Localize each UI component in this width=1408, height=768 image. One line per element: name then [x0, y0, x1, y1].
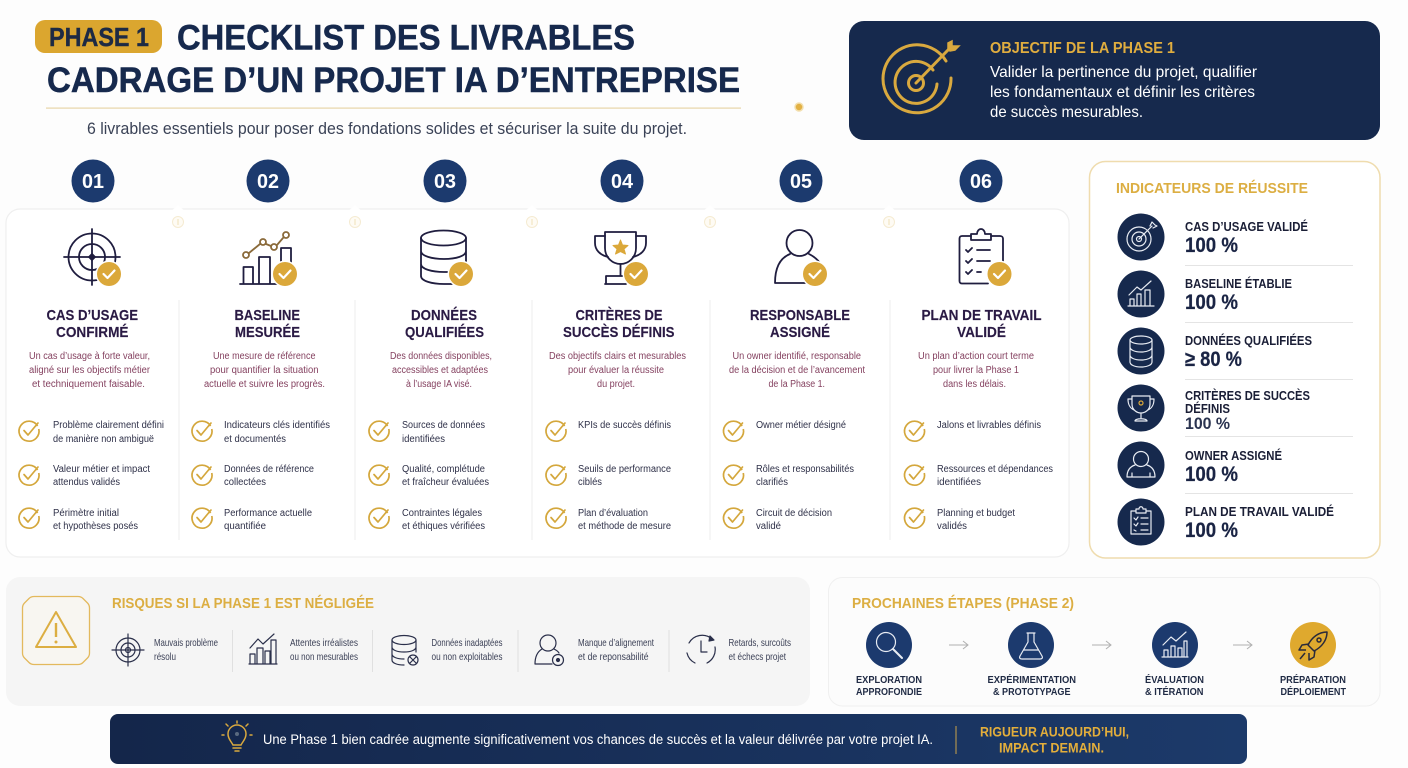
checklist: de manière non ambiguë — [53, 434, 154, 445]
risk: manque d'alignement: Manque d’alignement — [578, 637, 654, 649]
banner slogan: IMPACT DEMAIN. — [999, 740, 1104, 756]
heading: CAS D’USAGE — [46, 307, 138, 324]
checklist: identifiées — [937, 477, 981, 488]
icon: clipboard checklist — [960, 229, 1013, 288]
card 06: plan de travail validé — [905, 160, 1053, 532]
description: Des données disponibles, — [390, 351, 492, 362]
description — [204, 351, 325, 390]
description: pour quantifier la situation — [210, 365, 318, 376]
indicator: baseline établie — [1118, 270, 1292, 318]
heading — [405, 307, 484, 341]
description: de la Phase 1. — [768, 379, 825, 390]
checklist: Performance actuelle — [224, 508, 312, 519]
checklist: et éthiques vérifiées — [402, 521, 485, 532]
banner message: Une Phase 1 bien cadrée augmente significativement vos chances de succès et la valeur délivrée par votre projet IA. — [263, 732, 933, 747]
checklist: Rôles et responsabilités — [756, 464, 854, 475]
indicator: données qualifiées: ≥ 80 % — [1185, 348, 1242, 371]
risk: attentes irréalistes — [249, 634, 358, 664]
checklist: Contraintes légales — [402, 508, 482, 519]
indicator: données qualifiées — [1118, 328, 1312, 374]
description — [918, 351, 1034, 390]
next steps heading: PROCHAINES ÉTAPES (PHASE 2) — [852, 595, 1074, 612]
heading: MESURÉE — [235, 324, 300, 341]
card 01: cas d'usage confirmé — [19, 160, 164, 532]
number 05 — [780, 160, 822, 202]
description: du projet. — [597, 379, 635, 390]
step: exploration: EXPLORATION — [856, 674, 922, 686]
indicator: plan de travail validé: PLAN DE TRAVAIL VALIDÉ — [1185, 504, 1334, 519]
number 04 — [600, 160, 644, 202]
checklist: Circuit de décision — [756, 508, 832, 519]
checklist: et documentés — [224, 434, 286, 445]
panel: prochaines étapes (phase 2) — [828, 578, 1380, 706]
heading: ASSIGNÉ — [770, 324, 830, 341]
step: évaluation: & ITÉRATION — [1145, 685, 1204, 698]
indicator: critères de succès définis: 100 % — [1185, 414, 1230, 433]
heading — [46, 307, 138, 341]
checklist — [192, 420, 330, 532]
risk: attentes irréalistes: ou non mesurables — [290, 651, 358, 663]
indicator: critères de succès définis: DÉFINIS — [1185, 401, 1230, 416]
number 01: 01 — [82, 171, 104, 193]
icon: warning box — [22, 596, 90, 664]
description: à l’usage IA visé. — [406, 379, 472, 390]
icon: target — [64, 229, 122, 288]
panel: objectif de la phase 1 — [849, 21, 1380, 140]
checklist — [905, 420, 1053, 532]
objective text: Valider la pertinence du projet, qualifier — [990, 64, 1258, 81]
bottom banner — [110, 714, 1247, 764]
step: préparation déploiement — [1280, 622, 1347, 698]
checklist: attendus validés — [53, 477, 120, 488]
heading: RESPONSABLE — [750, 307, 850, 324]
panel: indicateurs de réussite — [1090, 162, 1380, 558]
indicator: critères de succès définis — [1118, 384, 1310, 433]
step: expérimentation: EXPÉRIMENTATION — [988, 673, 1076, 686]
icon: database — [421, 230, 474, 288]
icon: light bulb — [222, 721, 252, 751]
arrow — [1092, 641, 1111, 649]
description: et techniquement faisable. — [32, 379, 145, 390]
checklist: identifiées — [402, 434, 445, 445]
card 04: critères de succès définis — [546, 160, 686, 532]
indicator: plan de travail validé: 100 % — [1185, 519, 1238, 542]
objective text: de succès mesurables. — [990, 104, 1143, 121]
risk: retards — [687, 635, 791, 663]
description: de la décision et de l’avancement — [729, 365, 865, 376]
risk: mauvais problème: Mauvais problème — [154, 637, 218, 649]
checklist: validés — [937, 521, 967, 532]
description — [390, 351, 492, 390]
number 03 — [424, 160, 466, 202]
indicators heading: INDICATEURS DE RÉUSSITE — [1116, 180, 1308, 197]
indicator: baseline établie: 100 % — [1185, 291, 1238, 314]
number 02: 02 — [257, 171, 279, 193]
heading — [922, 307, 1042, 341]
indicator: critères de succès définis: CRITÈRES DE SUCCÈS — [1185, 388, 1310, 403]
decorative gold dot — [795, 103, 803, 111]
heading — [234, 307, 300, 341]
description: Un plan d’action court terme — [918, 351, 1034, 362]
indicator: owner assigné — [1118, 442, 1282, 488]
heading: CONFIRMÉ — [56, 324, 128, 341]
description: Une mesure de référence — [213, 351, 316, 362]
description: pour évaluer la réussite — [568, 365, 664, 376]
heading: PLAN DE TRAVAIL — [922, 307, 1042, 324]
risk: attentes irréalistes: Attentes irréalistes — [290, 637, 358, 649]
heading: QUALIFIÉES — [405, 324, 484, 341]
checklist: Périmètre initial — [53, 508, 119, 519]
checklist: Problème clairement défini — [53, 420, 164, 431]
panel: risques si la phase 1 est négligée — [6, 577, 810, 706]
checklist: Données de référence — [224, 464, 314, 475]
description — [549, 351, 686, 390]
number 04: 04 — [611, 171, 634, 193]
risk: données inadaptées: ou non exploitables — [432, 651, 502, 663]
checklist: Owner métier désigné — [756, 420, 846, 431]
description: dans les délais. — [943, 379, 1006, 390]
title line 2: CADRAGE D’UN PROJET IA D’ENTREPRISE — [47, 61, 740, 100]
risk: mauvais problème — [112, 634, 218, 666]
indicator: owner assigné: OWNER ASSIGNÉ — [1185, 448, 1282, 463]
checklist: Ressources et dépendances — [937, 464, 1053, 475]
checklist — [546, 420, 671, 532]
checklist — [369, 420, 489, 532]
checklist: Qualité, complétude — [402, 464, 485, 475]
arrow — [1233, 641, 1252, 649]
checklist: collectées — [224, 477, 266, 488]
step: expérimentation — [988, 622, 1076, 698]
risk: retards: et échecs projet — [728, 651, 786, 663]
checklist: Sources de données — [402, 420, 485, 431]
checklist: et hypothèses posés — [53, 521, 138, 532]
indicator: données qualifiées: DONNÉES QUALIFIÉES — [1185, 333, 1312, 348]
checklist: clarifiés — [756, 477, 788, 488]
banner slogan: RIGUEUR AUJOURD’HUI, — [980, 724, 1129, 740]
icon: person — [775, 230, 828, 288]
heading: VALIDÉ — [957, 324, 1006, 341]
indicator: cas d'usage validé: CAS D’USAGE VALIDÉ — [1185, 219, 1308, 234]
step: exploration — [856, 622, 922, 698]
heading: BASELINE — [234, 307, 300, 324]
description — [29, 351, 151, 390]
step: préparation déploiement: PRÉPARATION — [1280, 673, 1346, 686]
card 05: responsable assigné — [724, 160, 865, 532]
checklist: Planning et budget — [937, 508, 1015, 519]
description: Un owner identifié, responsable — [732, 351, 861, 362]
number 06: 06 — [970, 171, 992, 193]
checklist: KPIs de succès définis — [578, 420, 671, 431]
header — [35, 18, 803, 138]
heading — [563, 307, 674, 341]
risk: manque d'alignement: et de reponsabilité — [578, 651, 649, 663]
objective heading: OBJECTIF DE LA PHASE 1 — [990, 40, 1175, 57]
objective text: les fondamentaux et définir les critères — [990, 84, 1255, 101]
checklist: Jalons et livrables définis — [937, 420, 1041, 431]
indicator: cas d'usage validé — [1118, 214, 1308, 260]
checklist — [724, 420, 854, 532]
checklist: quantifiée — [224, 521, 266, 532]
checklist: ciblés — [578, 477, 602, 488]
risk: retards: Retards, surcoûts — [728, 637, 791, 649]
checklist: Indicateurs clés identifiés — [224, 420, 330, 431]
step: évaluation: ÉVALUATION — [1145, 673, 1204, 686]
risk: données inadaptées — [392, 636, 502, 665]
checklist: Seuils de performance — [578, 464, 671, 475]
checklist: et méthode de mesure — [578, 521, 671, 532]
description: actuelle et suivre les progrès. — [204, 379, 325, 390]
checklist: Valeur métier et impact — [53, 464, 150, 475]
heading: CRITÈRES DE — [576, 307, 662, 324]
heading — [750, 307, 850, 341]
description: Des objectifs clairs et mesurables — [549, 351, 686, 362]
icon: trophy — [595, 232, 650, 288]
subtitle: 6 livrables essentiels pour poser des fondations solides et sécuriser la suite du projet. — [87, 119, 687, 138]
panel: six deliverables — [6, 160, 1069, 557]
risk: manque d'alignement — [535, 635, 654, 666]
arrow — [949, 641, 968, 649]
description: pour livrer la Phase 1 — [933, 365, 1019, 376]
step: préparation déploiement: DÉPLOIEMENT — [1280, 685, 1347, 698]
description: accessibles et adaptées — [392, 365, 488, 376]
description: Un cas d’usage à forte valeur, — [29, 351, 150, 362]
card 03: données qualifiées — [369, 160, 492, 532]
step: expérimentation: & PROTOTYPAGE — [993, 686, 1070, 698]
objective text — [990, 64, 1258, 121]
card 02: baseline mesurée — [192, 160, 330, 532]
icon: bar chart with trend — [240, 232, 298, 288]
number 02 — [246, 160, 290, 202]
phase 1 badge: PHASE 1 — [49, 22, 149, 52]
indicator: owner assigné: 100 % — [1185, 463, 1238, 486]
heading: DONNÉES — [411, 307, 477, 324]
risk: mauvais problème: résolu — [154, 651, 176, 663]
title line 1: CHECKLIST DES LIVRABLES — [177, 18, 635, 58]
risk: données inadaptées: Données inadaptées — [432, 637, 502, 649]
step: évaluation — [1145, 622, 1204, 698]
banner slogan — [980, 724, 1129, 756]
number 06 — [960, 160, 1002, 202]
description: aligné sur les objectifs métier — [29, 365, 151, 376]
icon: target with arrow — [883, 41, 959, 113]
indicator: baseline établie: BASELINE ÉTABLIE — [1185, 276, 1292, 291]
heading: SUCCÈS DÉFINIS — [563, 324, 674, 341]
checklist — [19, 420, 164, 532]
checklist: validé — [756, 521, 781, 532]
step: exploration: APPROFONDIE — [856, 686, 922, 698]
indicator: plan de travail validé — [1118, 498, 1334, 546]
number 03: 03 — [434, 171, 456, 193]
description — [729, 351, 865, 390]
number 05: 05 — [790, 171, 812, 193]
checklist: Plan d’évaluation — [578, 508, 648, 519]
checklist: et fraîcheur évaluées — [402, 477, 489, 488]
number 01 — [72, 160, 114, 202]
risks heading: RISQUES SI LA PHASE 1 EST NÉGLIGÉE — [112, 595, 374, 612]
indicator: cas d'usage validé: 100 % — [1185, 234, 1238, 257]
